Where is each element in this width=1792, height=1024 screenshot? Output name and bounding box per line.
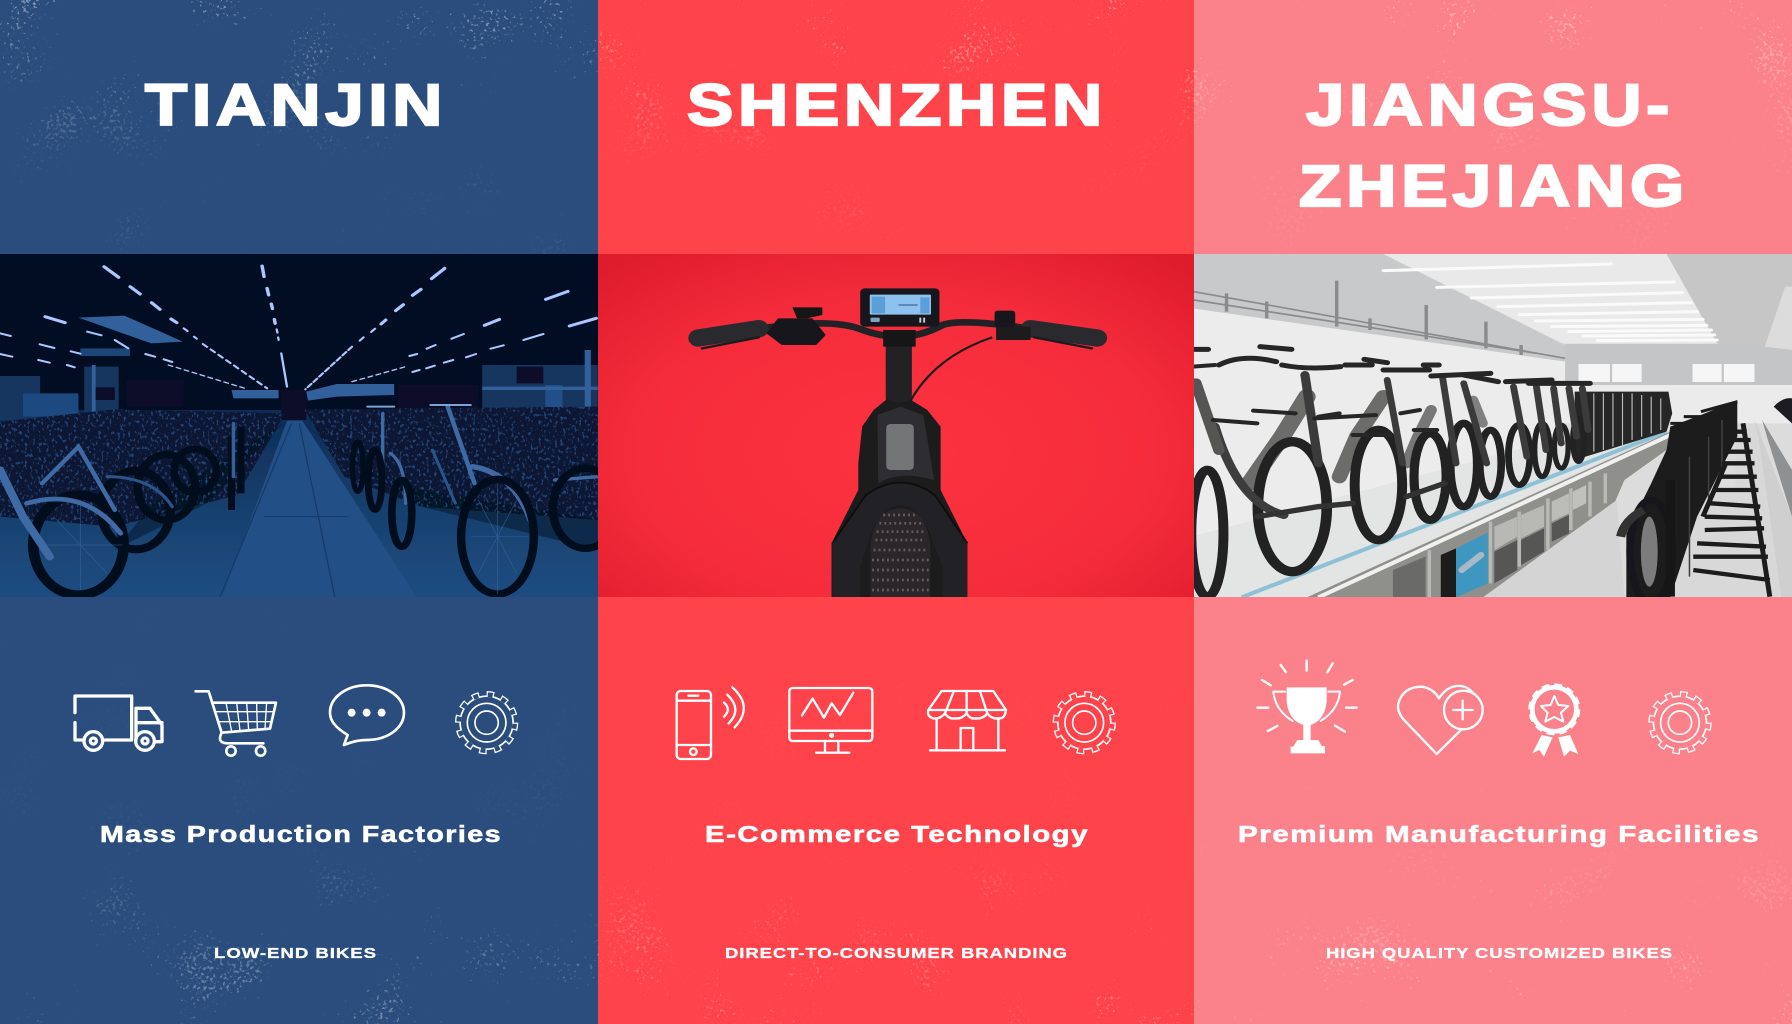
- caption: low-end bikes: LOW-END BIKES: [214, 945, 377, 962]
- caption: high quality customized bikes: HIGH QUALITY CUSTOMIZED BIKES: [1326, 945, 1673, 962]
- icon: trophy: [1257, 661, 1357, 753]
- icon: monitor with chart: [789, 688, 872, 753]
- icon row: truck, cart, chat, gear: [75, 685, 516, 756]
- subheading: Premium Manufacturing Facilities: Premium Manufacturing Facilities: [1238, 821, 1760, 847]
- bikes row: frames: [1196, 375, 1588, 517]
- panel: Jiangsu-Zhejiang: [1191, 0, 1792, 1024]
- heading: Jiangsu-Zhejiang: JIANGSU-: [1306, 73, 1674, 138]
- heading: Jiangsu-Zhejiang: ZHEJIANG: [1299, 154, 1689, 219]
- platform: [1192, 430, 1670, 597]
- floor aisle: [222, 421, 417, 597]
- subheading: Mass Production Factories: Mass Production Factories: [100, 821, 502, 847]
- icon: gear: [1055, 693, 1114, 752]
- caption: direct-to-consumer branding: DIRECT-TO-CONSUMER BRANDING: [725, 945, 1068, 962]
- photo: e-bike front view on red: [598, 254, 1194, 597]
- bikes right: [352, 442, 618, 594]
- heading: Tianjin: TIANJIN: [145, 73, 447, 138]
- bikes left: [33, 427, 241, 595]
- icon: delivery truck: [75, 696, 162, 750]
- icon: storefront: [928, 691, 1006, 750]
- photo: premium assembly line with rows of bikes: [1194, 254, 1792, 597]
- handlebar: [763, 322, 1027, 336]
- right rack: [1693, 423, 1770, 597]
- display: [860, 288, 939, 327]
- icon: gear: [1651, 693, 1709, 752]
- icon: shopping cart: [196, 691, 276, 756]
- blue box: [1456, 533, 1488, 597]
- far bike cluster: [1575, 392, 1672, 460]
- bikes row: handlebars and saddles: [1192, 347, 1590, 435]
- icon: gear: [457, 693, 516, 752]
- icon: award rosette: [1530, 685, 1578, 757]
- lower floor: [1483, 500, 1624, 597]
- icon: heart with plus: [1398, 686, 1483, 754]
- subheading: E-Commerce Technology: E-Commerce Technology: [705, 821, 1089, 847]
- icon row: phone, monitor, store, gear: [677, 687, 1114, 759]
- handlebar cable: [910, 337, 992, 402]
- icon: speech bubble: [330, 685, 404, 745]
- heading: Jiangsu-Zhejiang: [1299, 73, 1689, 219]
- right bike cluster: [1626, 400, 1737, 597]
- tyre: [871, 508, 930, 597]
- heading: Shenzhen: SHENZHEN: [687, 73, 1107, 138]
- icon: smartphone with signal: [677, 687, 744, 759]
- icon row: trophy, heart, badge, gear: [1257, 661, 1709, 757]
- cabinets: [1393, 485, 1586, 597]
- bikes row: frames behind: [1249, 397, 1483, 483]
- ceiling and walls: [1192, 254, 1717, 343]
- photo: blue-lit mass production factory: [0, 254, 598, 597]
- bikes row: wheels: [1191, 418, 1584, 597]
- panel: Tianjin: [0, 83, 598, 958]
- panel: Shenzhen: [598, 0, 1195, 1024]
